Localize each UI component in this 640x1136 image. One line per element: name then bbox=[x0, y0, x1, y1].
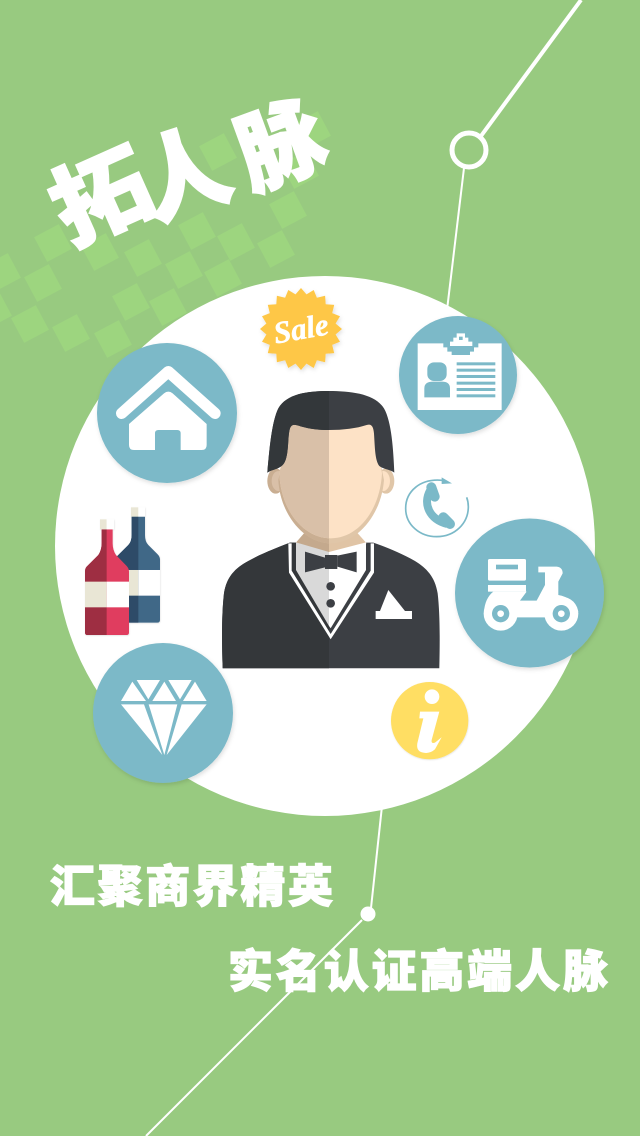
title: 拓 bbox=[28, 112, 170, 270]
icon: sale badge: Sale bbox=[271, 306, 331, 351]
businessman figure bbox=[222, 391, 440, 668]
blue bottle bbox=[117, 507, 161, 624]
hair bbox=[267, 391, 394, 473]
icon: id card bbox=[399, 316, 517, 434]
suit bbox=[222, 543, 440, 668]
pocket square bbox=[376, 590, 412, 619]
dot node bbox=[360, 906, 376, 922]
title: 人 bbox=[120, 91, 244, 244]
face bbox=[278, 422, 384, 543]
title bbox=[28, 64, 342, 270]
icon: sale badge bbox=[260, 288, 342, 370]
title: 脉 bbox=[216, 64, 342, 215]
bottles bbox=[85, 507, 160, 635]
ears bbox=[267, 468, 394, 494]
shirt buttons bbox=[326, 582, 335, 608]
icon: scooter bbox=[455, 518, 604, 668]
red bottle bbox=[85, 519, 129, 635]
connector lines bbox=[146, 0, 581, 1136]
shirt and lapels bbox=[288, 542, 374, 639]
icon: diamond bbox=[93, 643, 233, 783]
icon: info bbox=[391, 682, 468, 759]
large white circle bbox=[55, 276, 595, 816]
ring node bbox=[452, 133, 486, 167]
tagline 2: 实名认证高端人脉 bbox=[228, 935, 608, 1000]
neck bbox=[296, 528, 367, 553]
checkered pattern bbox=[0, 111, 331, 358]
icon: phone bbox=[406, 477, 468, 537]
bow tie bbox=[305, 552, 357, 572]
tagline 1: 汇聚商界精英 bbox=[50, 850, 333, 915]
icon: house bbox=[97, 343, 237, 483]
